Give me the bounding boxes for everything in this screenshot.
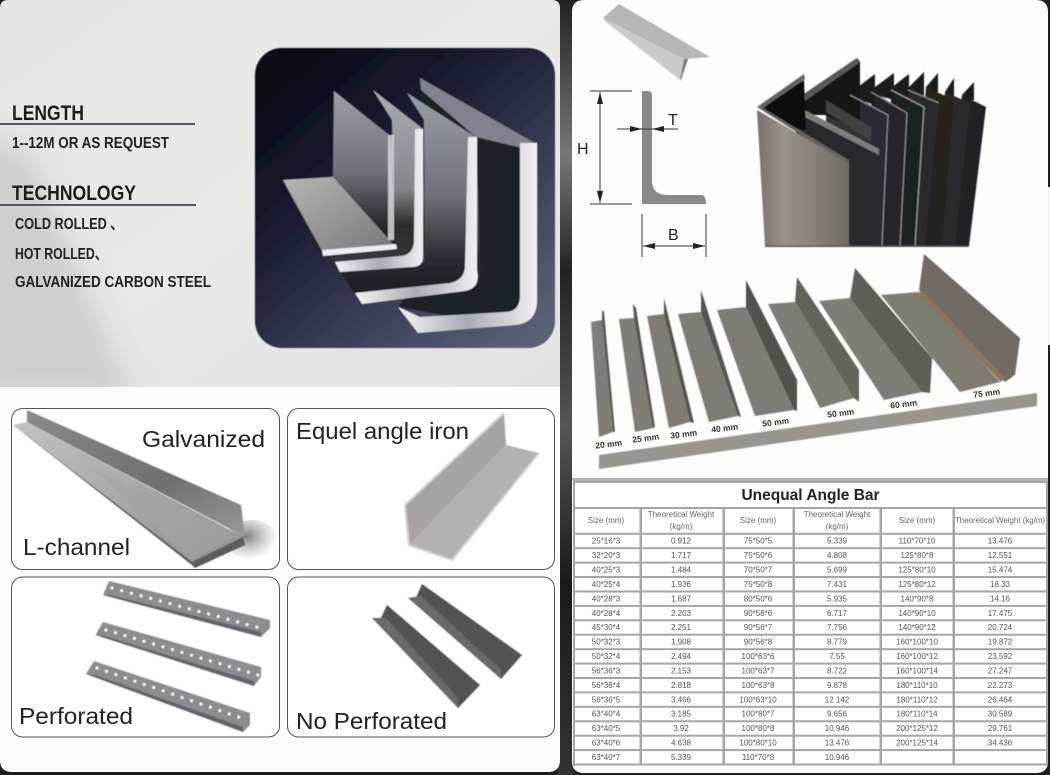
back angle [398,78,535,320]
table column 1: size: 40*28*3 [592,594,621,603]
table column 1: size: 56*36*3 [592,666,621,676]
table column 2: weight: 1.936 [671,580,692,589]
image: perforated bars [86,581,270,732]
panel: product types [0,387,560,772]
table column 5: size: 110*70*10 [899,537,936,546]
gutter between panels [558,0,574,775]
table column 3: size: 100*80*8 [742,724,775,733]
photo: stacked steel angles on dark background [255,48,555,348]
table column 4: weight: 8.779 [827,638,848,647]
table column 5: size: 180*110*14 [896,710,938,719]
table headers: (kg/m) [826,522,849,531]
table column 6: weight: 20.724 [988,623,1013,632]
table title: Unequal Angle Bar [741,487,880,504]
table column 6: weight: 15.474 [988,566,1013,574]
table column 2: weight: 1.908 [671,638,692,647]
dimension H: H [577,141,589,158]
label: Equel angle iron: Equel angle iron [296,418,469,444]
table column 5: size: 160*100*10 [896,638,938,647]
table column 3: size: 75*50*6 [744,551,773,560]
table headers: Size (mm) [899,516,936,525]
table headers: Size (mm) [740,516,777,525]
table column 2: weight: 2.203 [671,609,692,618]
table column 6: weight: 12.551 [988,551,1013,560]
table column 3: size: 100*80*7 [742,710,775,719]
table column 5: size: 160*100*12 [896,652,938,661]
table headers: Theoretical Weight (kg/m) [955,516,1045,525]
table column 6: weight: 19.872 [988,638,1013,647]
photo: angle bars by size with ruler [591,254,1037,469]
size labels [595,386,1001,451]
table column 3: size: 90*56*7 [744,623,773,632]
table column 2: weight [671,537,692,762]
table column 4: weight: 12.142 [825,695,850,704]
label: L-channel: L-channel [23,534,130,560]
bar 60 mm [819,298,922,400]
size labels: 20 mm [595,437,623,451]
table column 6: weight: 22.273 [988,681,1013,690]
card: no perforated [288,577,554,737]
table column 2: weight: 2.494 [671,652,692,661]
size labels: 75 mm [973,386,1001,400]
table column 4: weight: 5.699 [827,566,848,574]
table column 5: size: 160*100*14 [896,666,938,676]
table column 2: weight: 5.339 [671,753,692,762]
table column 5: size: 140*90*12 [898,623,936,632]
table column 4: weight: 9.878 [827,681,848,690]
table column 6: weight: 13.476 [988,537,1013,546]
table column 2: weight: 2.251 [671,623,692,632]
table column 5: size: 200*125*12 [896,724,938,733]
table column 2: weight: 4.638 [671,739,692,748]
ruler [599,393,1037,469]
table column 1: size: 56*36*5 [592,695,621,704]
table column 6: weight: 26.464 [988,695,1013,704]
second angle [331,90,425,270]
table column 5: size: 140*90*10 [898,609,936,618]
card: equal angle iron [288,408,554,570]
table column 4: weight: 10.946 [825,724,850,733]
table column 1: size: 40*25*3 [592,566,621,574]
table column 5: size: 180*110*10 [896,681,938,690]
table column 6: weight: 34.436 [988,739,1013,748]
table column 5: size [896,537,938,748]
table column 4: weight: 7.431 [827,580,848,589]
table column 2: weight: 0.912 [671,537,692,546]
dimension T: T [668,112,678,129]
table column 1: size: 63*40*7 [592,753,621,762]
table column 4: weight: 9.656 [827,710,848,719]
table column 6: weight: 17.475 [988,609,1013,618]
table column 4: weight: 13.476 [825,739,850,748]
table column 3: size [739,537,777,762]
table column 3: size: 100*63*8 [742,681,775,690]
table column 4: weight: 6.717 [827,609,848,618]
table column 6: weight: 30.589 [988,710,1013,719]
image: plain angle bars [372,584,522,708]
table column 1: size: 56*36*4 [592,681,621,690]
table column 4: weight: 4.808 [827,551,848,560]
bar 20 mm [591,320,613,437]
table column 1: size: 32*20*3 [592,551,621,560]
table column 5: size: 125*80*10 [898,566,936,574]
bar 50 mm (first) [717,307,794,416]
table column 3: size: 90*56*6 [744,609,773,618]
table column 4: weight: 7.756 [827,623,848,632]
table column 4: weight: 8.722 [827,666,848,676]
table column 4: weight: 7.55 [829,652,845,661]
photo: nested dark angles [757,58,986,247]
table column 2: weight: 1.484 [671,566,692,574]
table column 6: weight: 27.247 [988,666,1013,676]
table headers: (kg/m) [670,522,693,531]
label: Perforated: Perforated [19,703,133,729]
card: perforated [12,577,280,737]
table column 5: size: 180*110*12 [896,695,938,704]
front angle [283,91,396,255]
table column 6: weight: 29.761 [988,724,1013,733]
heading: length: LENGTH [12,102,84,125]
table column 1: size: 63*40*4 [592,710,621,719]
table column 3: size: 75*50*5 [744,537,773,546]
dimension B: B [668,227,679,244]
table column 5: size: 125*80*12 [898,580,936,589]
diagram: angle cross-section [577,91,706,257]
bar 30 mm [647,314,690,428]
table column 6: weight: 18.33 [990,580,1011,589]
text: hot rolled: HOT ROLLED、 [15,246,107,263]
table column 1: size: 45*30*4 [592,623,621,632]
panel: dimensions, photos and table [572,0,1048,773]
table headers: Theoretical Weight [648,510,715,519]
table column 1: size: 25*16*3 [592,537,621,546]
third angle [340,93,481,300]
table column 2: weight: 1.687 [671,594,692,603]
table column 4: weight: 10.946 [825,753,850,762]
table column 4: weight [825,537,850,762]
table column 1: size: 50*32*4 [592,652,621,661]
table column 1: size: 63*40*6 [592,739,621,748]
table column 3: size: 70*50*7 [744,566,773,574]
table column 1: size: 63*40*5 [592,724,621,733]
table column 2: weight: 3.466 [671,695,692,704]
table column 3: size: 100*63*10 [739,695,777,704]
table column 6: weight: 23.592 [988,652,1013,661]
table headers: Theoretical Weight [804,510,871,519]
size labels: 50 mm [827,406,855,420]
table column 3: size: 100*63*7 [742,666,775,676]
size labels: 40 mm [711,421,739,435]
size labels: 25 mm [632,431,660,445]
table column 3: size: 90*56*8 [744,638,773,647]
table column 2: weight: 3.185 [671,710,692,719]
table column 3: size: 75*50*8 [744,580,773,589]
table: unequal angle bar [573,481,1048,766]
bar 75 mm [881,292,1000,392]
image: equal angle [405,413,539,560]
table headers: Size (mm) [588,516,625,525]
label: Galvanized: Galvanized [142,426,265,452]
table column 5: size: 200*125*14 [896,739,938,748]
panel: specifications [0,0,560,400]
table column 1: size: 40*28*4 [592,609,621,618]
table column 5: size: 140*90*8 [901,594,934,603]
size labels: 60 mm [890,397,918,411]
bar 25 mm [619,318,654,432]
table column 1: size [592,537,621,762]
text: length value: 1--12M OR AS REQUEST [12,135,169,152]
table headers [588,510,1045,531]
table column 1: size: 40*25*4 [592,580,621,589]
text: cold rolled: COLD ROLLED 、 [15,216,123,233]
table column 3: size: 100*63*6 [742,652,775,661]
image: small angle render [603,4,710,80]
text: galvanized carbon steel: GALVANIZED CARBON STEEL [15,274,211,291]
table column 4: weight: 5.935 [827,594,848,603]
table column 4: weight: 5.339 [827,537,848,546]
image: galvanized bar [13,410,245,568]
table column 2: weight: 2.153 [671,666,692,676]
bar 40 mm [678,312,738,422]
table column 2: weight: 2.818 [671,681,692,690]
table column 5: size: 125*80*8 [901,551,934,560]
table column 3: size: 100*80*10 [739,739,777,748]
table column 2: weight: 1.717 [671,551,692,560]
right-edge light strip [1043,187,1050,345]
table column 3: size: 110*70*8 [742,753,775,762]
label: No Perforated: No Perforated [296,708,447,734]
table column 2: weight: 3.92 [673,724,689,733]
table column 3: size: 80*50*6 [744,594,773,603]
table column 6: weight [988,537,1013,748]
size labels: 30 mm [670,427,698,441]
table column 1: size: 50*32*3 [592,638,621,647]
card: galvanized L-channel [12,408,280,570]
size labels: 50 mm [762,415,790,429]
heading: technology: TECHNOLOGY [12,182,136,205]
table column 6: weight: 14.16 [990,594,1011,603]
bar 50 mm (second) [768,302,854,408]
